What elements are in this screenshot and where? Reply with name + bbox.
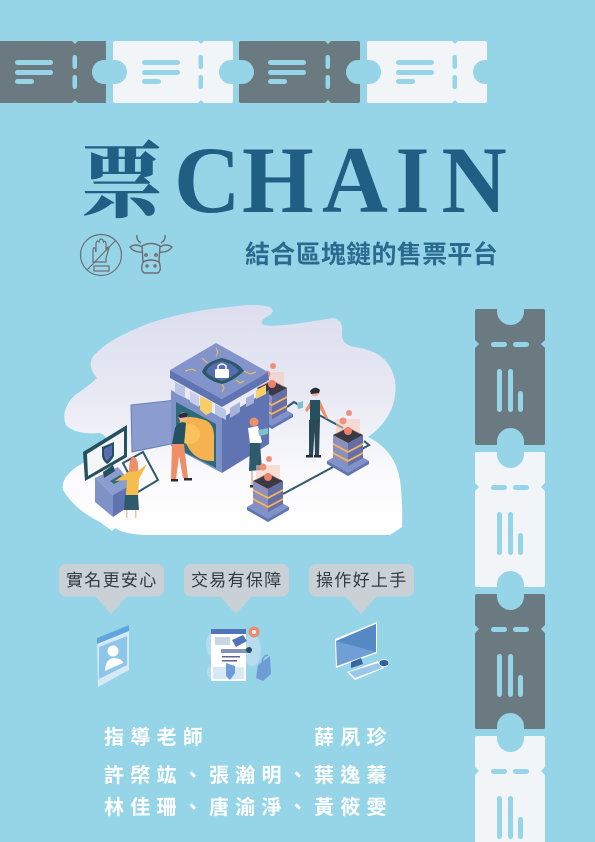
title: I xyxy=(396,128,430,233)
subtitle: 結合區塊鏈的售票平台 xyxy=(245,240,498,269)
credits xyxy=(104,726,393,819)
callout: 實名更安心: 實名更安心 xyxy=(66,571,158,590)
callout: 操作好上手: 操作好上手 xyxy=(316,571,408,590)
backdrop blob xyxy=(63,305,402,535)
icon: secure document xyxy=(206,626,271,681)
icon: cow xyxy=(130,235,172,273)
ticket strip: right side xyxy=(475,298,545,842)
title: H xyxy=(242,129,314,233)
man with coin xyxy=(171,412,192,482)
icon: no-hand sign xyxy=(80,234,122,276)
callout: 實名更安心 xyxy=(59,564,164,614)
server bottom xyxy=(247,456,289,522)
woman at desk xyxy=(115,457,147,518)
computer desk xyxy=(83,425,132,517)
illustration: blockchain vault scene xyxy=(63,305,402,535)
team row 1: 許棨竑、張瀚明、葉逸蓁 xyxy=(104,763,393,787)
title: N xyxy=(442,128,507,234)
wires xyxy=(123,402,369,494)
title: C xyxy=(174,129,241,233)
title: 票 xyxy=(81,117,163,234)
team row 2: 林佳珊、唐渝淨、黃筱雯 xyxy=(104,795,393,819)
vault roof xyxy=(170,343,269,407)
woman with tablet xyxy=(248,418,268,488)
title xyxy=(81,117,507,234)
ticket strip: top xyxy=(0,41,501,103)
man standing xyxy=(297,388,328,458)
vault body xyxy=(171,382,269,473)
callout: 交易有保障: 交易有保障 xyxy=(191,571,282,590)
advisor label: 指導老師 xyxy=(104,726,209,749)
icon: desktop computer xyxy=(335,622,389,680)
server behind vault xyxy=(251,363,293,429)
vault door xyxy=(131,400,176,452)
callout: 操作好上手 xyxy=(309,564,414,614)
server right xyxy=(327,410,369,476)
callout: 交易有保障 xyxy=(184,564,289,614)
icon: id profile card xyxy=(97,625,129,687)
title: A xyxy=(322,128,388,233)
advisor name: 薛夙珍 xyxy=(314,726,393,749)
